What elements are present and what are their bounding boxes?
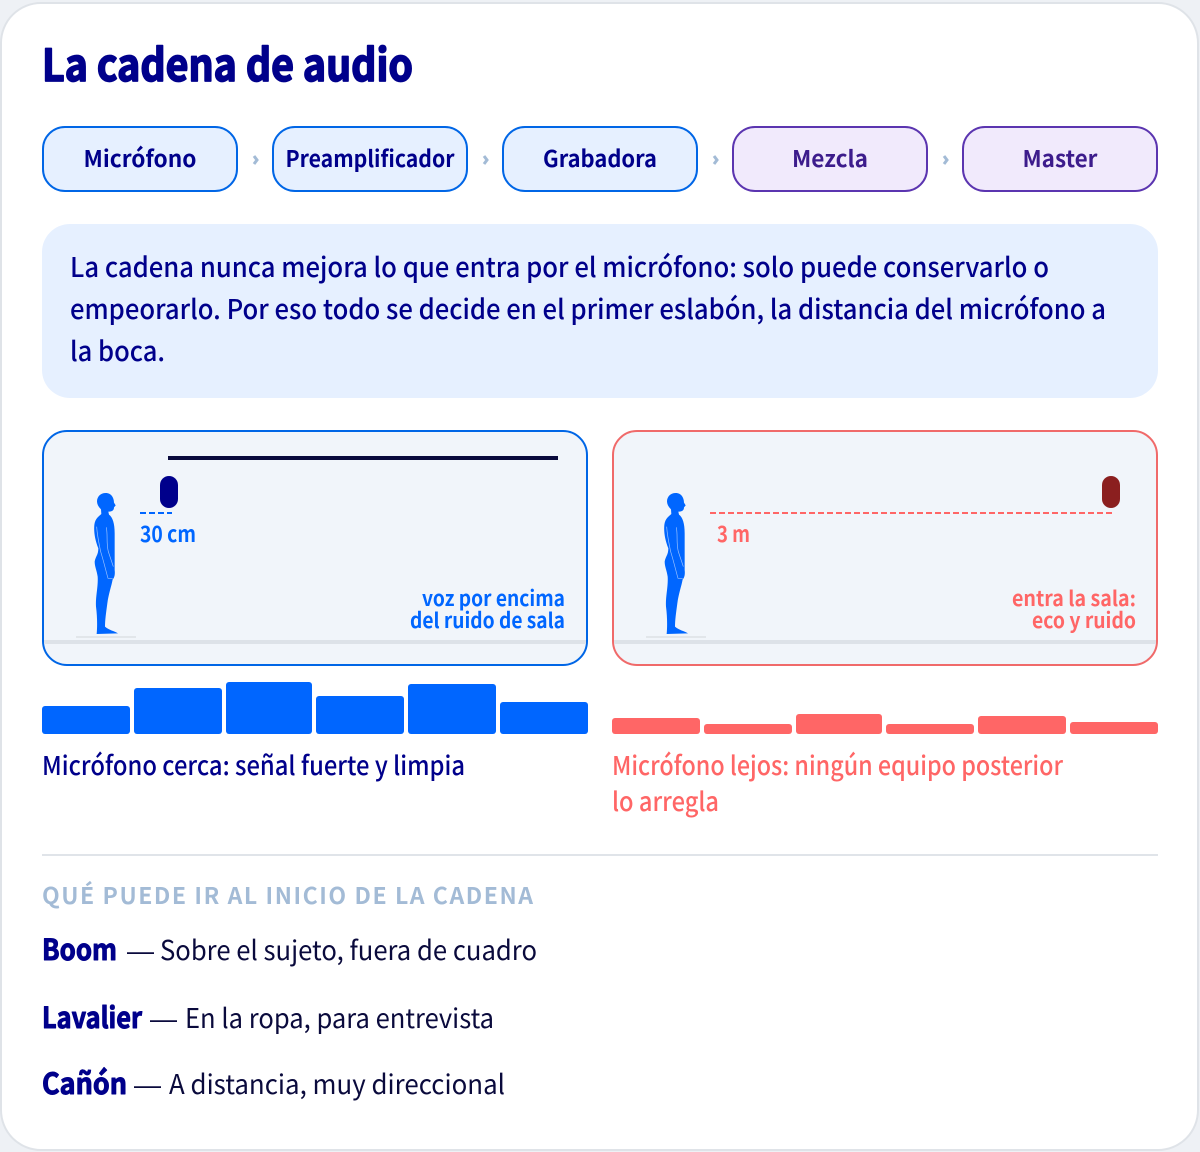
step: Mezcla — [733, 127, 927, 191]
annotation: del ruido de sala — [410, 605, 565, 635]
callout: empeorarlo. Por eso todo se decide en el primer eslabón, la distancia del micrófono a — [70, 288, 1106, 327]
panel: microphone far — [613, 431, 1157, 665]
arrow — [944, 156, 947, 164]
chain of audio steps — [43, 127, 1157, 191]
annotation: eco y ruido — [1032, 605, 1136, 635]
floor — [44, 640, 586, 644]
callout: La cadena nunca mejora lo que entra por el micrófono: solo puede conservarlo o — [70, 246, 1049, 285]
step: Master: Master — [1022, 140, 1098, 174]
item: Lavalier: Lavalier — [42, 995, 142, 1037]
item: Lavalier — [42, 995, 494, 1037]
annotation — [1012, 583, 1136, 635]
step: Micrófono: Micrófono — [84, 140, 196, 174]
icon: person — [664, 493, 688, 634]
icon: microphone — [160, 476, 178, 508]
callout: la boca. — [70, 330, 165, 369]
arrow — [714, 156, 717, 164]
item: Cañón: A distancia, muy direccional — [169, 1063, 505, 1102]
step: Master — [963, 127, 1157, 191]
item: Lavalier: En la ropa, para entrevista — [185, 997, 494, 1036]
panel: microphone close — [43, 431, 587, 665]
icon: person — [94, 493, 118, 634]
caption: close: Micrófono cerca: señal fuerte y limpia — [42, 746, 465, 783]
item: Cañón: Cañón — [42, 1061, 127, 1103]
item: Boom: Boom — [42, 927, 117, 969]
distance line — [710, 512, 1112, 514]
item: Cañón — [42, 1061, 505, 1103]
chart: weak signal bars — [612, 714, 1158, 734]
caption: far: Micrófono lejos: ningún equipo posterior — [612, 746, 1063, 783]
annotation — [410, 583, 565, 635]
annotation: entra la sala: — [1012, 583, 1136, 613]
item: Boom — [42, 927, 537, 969]
list: microphone types — [42, 927, 537, 1103]
annotation: voz por encima — [422, 583, 565, 613]
caption: far: lo arregla — [612, 782, 719, 819]
distance label: 3 m — [717, 517, 750, 549]
item: Boom: — — [127, 936, 154, 966]
distance line — [140, 512, 172, 514]
item: Cañón: — — [134, 1070, 161, 1100]
boom bar — [168, 456, 558, 460]
floor — [614, 640, 1156, 644]
section heading: QUÉ PUEDE IR AL INICIO DE LA CADENA — [42, 877, 533, 911]
callout — [42, 224, 1158, 398]
chart: strong signal bars — [42, 682, 588, 734]
arrow — [484, 156, 487, 164]
item: Boom: Sobre el sujeto, fuera de cuadro — [160, 929, 537, 968]
caption: far — [612, 746, 1063, 819]
icon: microphone — [1102, 476, 1120, 508]
step: Grabadora — [503, 127, 697, 191]
item: Lavalier: — — [150, 1004, 177, 1034]
distance label: 30 cm — [140, 517, 196, 549]
arrow — [254, 156, 257, 164]
step: Grabadora: Grabadora — [543, 140, 657, 174]
step: Micrófono — [43, 127, 237, 191]
step: Preamplificador: Preamplificador — [286, 140, 455, 174]
step: Preamplificador — [273, 127, 467, 191]
title: La cadena de audio — [42, 30, 413, 94]
step: Mezcla: Mezcla — [792, 140, 868, 174]
